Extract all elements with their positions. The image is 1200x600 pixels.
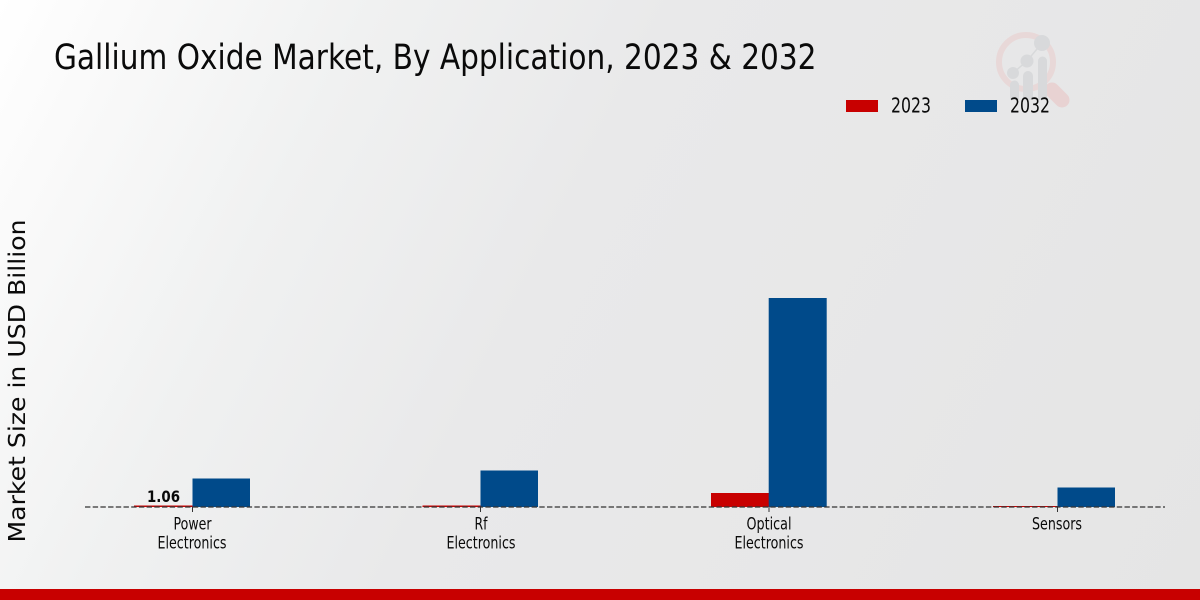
category label: power electronics: Power — [174, 514, 212, 534]
baseline — [85, 506, 1165, 508]
bars: sensors — [993, 488, 1115, 507]
bars: power electronics — [134, 478, 250, 507]
legend item: 2032 — [965, 94, 1050, 118]
y axis title: Market Size in USD Billion — [5, 220, 31, 542]
legend item: 2023: 2023 — [891, 94, 931, 118]
title: Gallium Oxide Market, By Application, 2023 & 2032 — [54, 38, 816, 78]
value label: 1.06 — [147, 487, 180, 506]
legend — [846, 94, 1050, 118]
category label: rf electronics: Rf — [474, 514, 488, 534]
bars: optical electronics — [711, 298, 827, 507]
bars: rf electronics — [422, 470, 538, 507]
category label: optical electronics: Electronics — [734, 534, 804, 554]
bar chart — [85, 298, 1165, 554]
icon: watermark logo — [999, 35, 1062, 100]
tick marks — [192, 507, 1058, 512]
category label: power electronics: Electronics — [158, 534, 227, 554]
footer bar — [0, 589, 1200, 600]
category label: sensors: Sensors — [1032, 514, 1082, 534]
category label: rf electronics: Electronics — [446, 534, 516, 554]
category label: optical electronics: Optical — [746, 514, 792, 534]
legend item: 2032: 2032 — [1010, 94, 1050, 118]
legend item: 2023 — [846, 94, 931, 118]
